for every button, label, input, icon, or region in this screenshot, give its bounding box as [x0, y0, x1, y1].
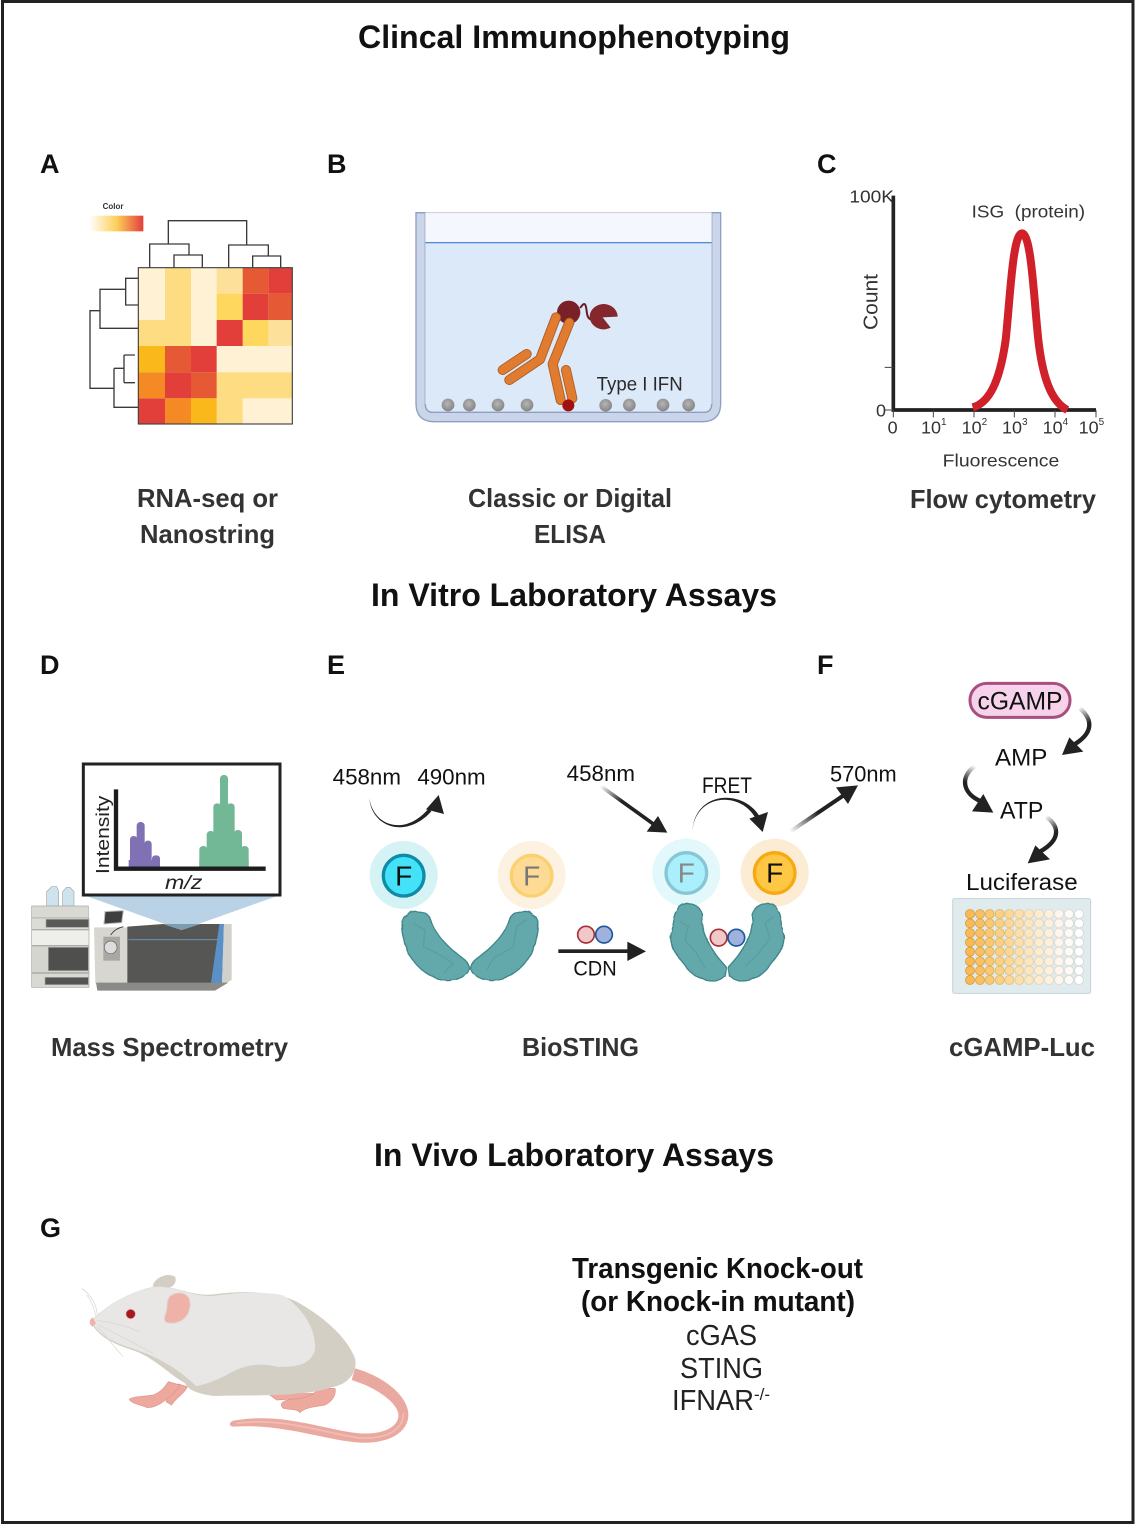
spectrum inset: Intensity: [92, 795, 113, 874]
hind legs: [268, 1388, 335, 1413]
text block: transgenic models: IFNAR: [672, 1385, 754, 1417]
orange fluorophore, dim: F: [523, 860, 540, 891]
axis labels: 0: [888, 417, 898, 437]
axis labels: 10: [962, 417, 982, 437]
panel F: cGAMP luciferase assay: [953, 683, 1091, 993]
cyan fluorophore, dim: F: [678, 858, 695, 889]
capture beads: [442, 399, 695, 412]
LC stack: [32, 887, 89, 987]
panel label G: G: [40, 1213, 61, 1243]
text block: transgenic models: STING: [680, 1353, 763, 1385]
AMP label: AMP: [995, 744, 1047, 771]
panel D: mass spectrometry: [32, 764, 280, 991]
dendrograms: [90, 221, 281, 407]
caption: Classic or Digital ELISA: [468, 483, 672, 549]
panel label C: C: [817, 149, 836, 179]
caption: Mass Spectrometry: Mass Spectrometry: [51, 1032, 289, 1062]
caption: Flow cytometry: Flow cytometry: [910, 484, 1097, 514]
axis labels: 1: [941, 417, 947, 428]
axis labels: 10: [921, 417, 941, 437]
text block: transgenic models: Transgenic Knock-out: [572, 1253, 863, 1285]
panel G: mouse illustration: [82, 1275, 408, 1443]
caption: RNA-seq or Nanostring: [137, 483, 278, 549]
bound CDN: [710, 929, 745, 946]
panel E: BioSTING FRET, open state: [333, 764, 646, 981]
cGAMP pill: cGAMP: [977, 688, 1062, 715]
axis labels: 100K: [849, 187, 894, 207]
panel C: flow cytometry histogram: [849, 187, 1105, 471]
panel label E: E: [327, 650, 345, 680]
purple peaks: [129, 822, 160, 869]
spectrum inset: m/z: [165, 873, 203, 894]
CDN label: CDN: [573, 956, 617, 980]
protein monomers: [402, 911, 538, 981]
FRET arrow: [692, 798, 768, 832]
axis labels: 10: [1002, 417, 1022, 437]
axis labels: ISG (protein): [972, 201, 1085, 221]
arrow ATP to Luciferase: [1028, 817, 1056, 863]
caption: Classic or Digital ELISA: Classic or Digital: [468, 483, 672, 513]
tail: [230, 1368, 408, 1443]
CDN dinucleotide: [578, 926, 612, 943]
body: [91, 1286, 356, 1396]
back ear: [153, 1275, 176, 1287]
front legs: [129, 1382, 187, 1408]
axis labels: 3: [1022, 417, 1028, 428]
caption: Classic or Digital ELISA: ELISA: [534, 519, 606, 549]
panel label D: D: [40, 650, 60, 680]
text block: transgenic models: [572, 1253, 863, 1417]
Luciferase label: Luciferase: [966, 869, 1078, 895]
text block: transgenic models: cGAS: [686, 1320, 757, 1352]
red histogram curve: [973, 233, 1067, 410]
ear: [164, 1293, 190, 1323]
eye: [126, 1309, 135, 1319]
axes: [893, 196, 1096, 410]
ATP label: ATP: [1000, 797, 1043, 824]
panel label A: A: [40, 149, 60, 179]
excitation label: 458nm: [567, 761, 635, 786]
whiskers: [82, 1288, 153, 1357]
reaction arrow: [558, 942, 646, 961]
96-well plate: [953, 899, 1091, 993]
title: Clincal Immunophenotyping: [358, 19, 790, 55]
protein dimer: [670, 903, 784, 981]
caption: RNA-seq or Nanostring: RNA-seq or: [137, 483, 278, 513]
orange fluorophore, bright: [741, 839, 809, 907]
cyan fluorophore: F: [395, 860, 412, 891]
body highlight: [92, 1287, 315, 1386]
panel A: heatmap with dendrograms: [89, 202, 292, 424]
caption: cGAMP-Luc: cGAMP-Luc: [949, 1032, 1095, 1062]
mass spectrometer: [94, 911, 232, 991]
well: [416, 213, 721, 422]
orange fluorophore, dim: [498, 841, 566, 909]
cGAMP pill: [970, 683, 1070, 717]
emission arrow: [790, 785, 858, 832]
panel E: BioSTING FRET, bound state: [567, 761, 897, 981]
arrow cGAMP to AMP: [1062, 708, 1089, 755]
text block: transgenic models: -/-: [754, 1385, 770, 1404]
panel B: ELISA well: [416, 213, 721, 422]
axis labels: 2: [982, 417, 988, 428]
axis labels: 10: [1079, 417, 1099, 437]
570nm label: 570nm: [830, 762, 897, 787]
cyan fluorophore: [370, 841, 438, 909]
text block: transgenic models: (or Knock-in mutant): [581, 1286, 855, 1318]
section heading: in vitro: In Vitro Laboratory Assays: [371, 577, 777, 613]
tick marks: [885, 367, 1096, 417]
axis labels: 0: [876, 401, 886, 421]
projection beam: [83, 895, 280, 930]
colour legend: [89, 202, 143, 231]
caption: BioSTING: BioSTING: [522, 1032, 639, 1062]
axis labels: 5: [1099, 417, 1105, 428]
panel label B: B: [327, 149, 346, 179]
excitation arrow: [601, 786, 667, 833]
emission arrow: [369, 795, 444, 827]
FRET label: FRET: [702, 773, 752, 798]
label: Type I IFN: Type I IFN: [597, 375, 683, 396]
axis labels: Count: [861, 274, 883, 330]
green peaks: [199, 775, 249, 869]
axis labels: Fluorescence: [943, 451, 1059, 471]
wavelength labels: 490nm: [417, 764, 486, 789]
cyan fluorophore, dim: [652, 839, 720, 907]
colour legend: Color: [103, 202, 124, 211]
axis labels: 4: [1063, 417, 1069, 428]
wavelength labels: [333, 764, 486, 789]
wavelength labels: 458nm: [333, 764, 401, 789]
orange fluorophore, bright: F: [766, 858, 783, 889]
section heading: in vivo: In Vivo Laboratory Assays: [374, 1137, 774, 1173]
caption: RNA-seq or Nanostring: Nanostring: [140, 519, 275, 549]
heatmap cells: [138, 268, 292, 424]
axis labels: [849, 187, 1105, 471]
arrow AMP to ATP: [965, 766, 993, 813]
axis labels: 10: [1043, 417, 1063, 437]
spectrum inset: [83, 764, 280, 895]
nose: [90, 1317, 96, 1327]
antibody with enzyme: [503, 301, 618, 411]
panel label F: F: [817, 650, 834, 680]
